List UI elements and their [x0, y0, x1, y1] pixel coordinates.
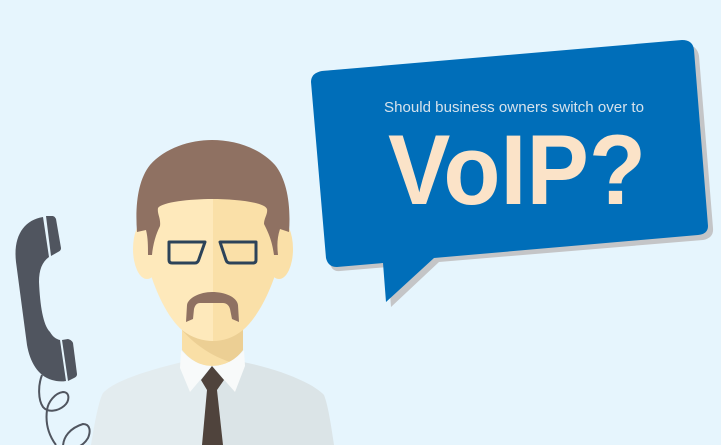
- man character: [91, 140, 334, 445]
- telephone handset with cord: [16, 216, 90, 445]
- handset main: [16, 217, 66, 381]
- hair: [136, 140, 289, 255]
- phone cord: [39, 375, 90, 445]
- collar left: [180, 350, 212, 392]
- face right half: [213, 190, 279, 341]
- neck: [182, 325, 243, 366]
- tie: [201, 366, 224, 445]
- moustache: [186, 292, 239, 322]
- shirt left: [91, 362, 212, 445]
- VoIP heading: VoIP?: [388, 114, 646, 225]
- collar right: [212, 350, 245, 392]
- subtitle text: Should business owners switch over to: [384, 100, 644, 116]
- speech bubble: [311, 40, 713, 307]
- bubble body: [311, 40, 708, 302]
- mouthpiece cap: [62, 339, 77, 381]
- left ear: [133, 219, 161, 279]
- earpiece cap: [46, 216, 61, 256]
- bubble shadow: [316, 45, 713, 307]
- glasses: [169, 242, 256, 263]
- neck shadow: [182, 325, 243, 362]
- shirt right: [212, 362, 334, 445]
- right ear: [265, 219, 293, 279]
- face left half: [147, 190, 213, 341]
